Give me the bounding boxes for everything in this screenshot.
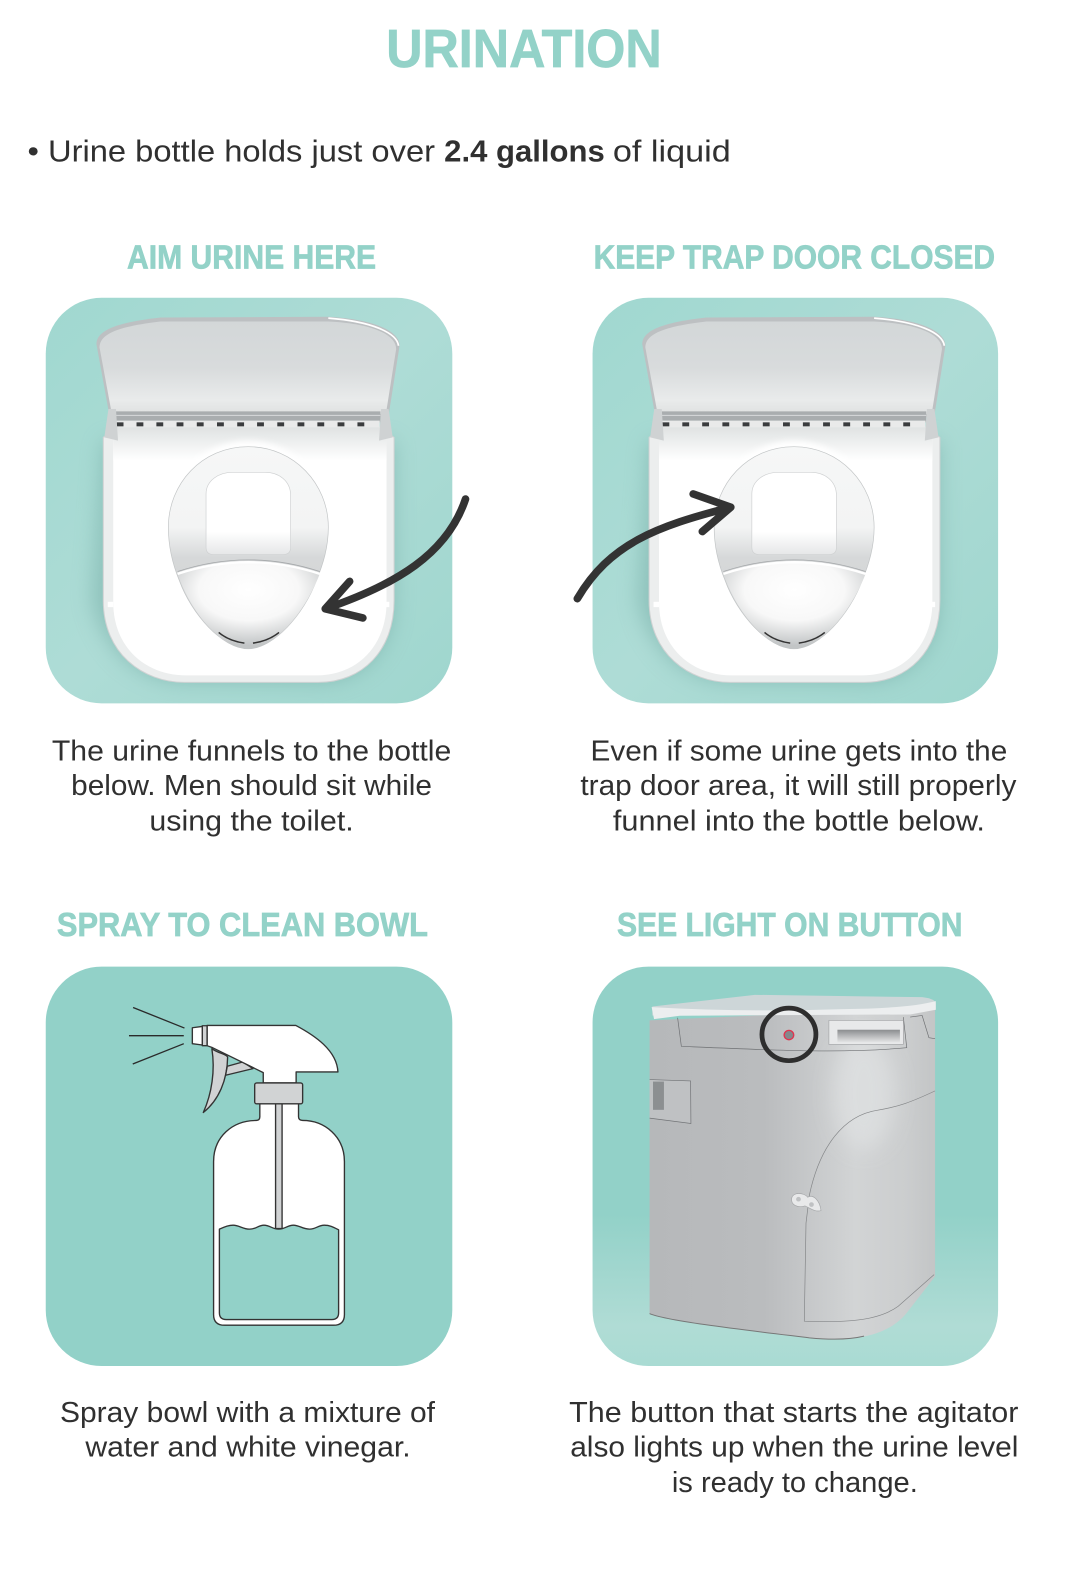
panel: aim urine here — [46, 239, 466, 837]
description: Even if some urine gets into the — [591, 735, 1007, 767]
description: Spray bowl with a mixture of — [60, 1397, 436, 1429]
description: using the toilet. — [149, 805, 354, 837]
heading: KEEP TRAP DOOR CLOSED — [594, 239, 995, 276]
side hatch — [650, 1080, 691, 1123]
description: The button that starts the agitator — [569, 1397, 1019, 1429]
tile background — [46, 967, 452, 1366]
description — [60, 1397, 436, 1463]
arrow to bowl — [325, 499, 466, 618]
tile background — [593, 967, 998, 1366]
heading: SPRAY TO CLEAN BOWL — [57, 907, 428, 944]
panel: spray to clean bowl — [46, 907, 452, 1463]
bullet: urine bottle capacity: of liquid — [613, 135, 731, 169]
description: also lights up when the urine level — [570, 1431, 1018, 1463]
panel: see light on button — [569, 907, 1019, 1499]
unit body — [650, 1007, 935, 1339]
callout ring — [762, 1008, 816, 1061]
arrow to trap door — [577, 494, 731, 599]
handle slot — [829, 1020, 903, 1044]
description — [569, 1397, 1019, 1499]
lid — [652, 995, 936, 1015]
toilet top view — [638, 317, 945, 682]
bullet: urine bottle capacity: 2.4 gallons — [444, 135, 605, 169]
description: funnel into the bottle below. — [613, 805, 985, 837]
toilet top view — [92, 317, 400, 682]
description: The urine funnels to the bottle — [52, 735, 451, 767]
description: trap door area, it will still properly — [580, 770, 1017, 802]
heading: SEE LIGHT ON BUTTON — [617, 907, 963, 944]
tile background — [593, 298, 998, 703]
indicator light — [784, 1030, 794, 1040]
control strip outline — [678, 1015, 935, 1051]
bullet: urine bottle capacity — [27, 135, 731, 169]
title: URINATION — [386, 19, 662, 79]
description: water and white vinegar. — [84, 1431, 411, 1463]
tile background — [46, 298, 452, 703]
description: below. Men should sit while — [71, 770, 432, 802]
bullet: urine bottle capacity: • Urine bottle holds just over — [27, 135, 435, 169]
description — [52, 735, 451, 837]
panel: keep trap door closed — [577, 239, 1017, 837]
description — [580, 735, 1017, 837]
description: is ready to change. — [672, 1467, 918, 1499]
door seam — [804, 1091, 935, 1322]
icon: spray bottle — [129, 1007, 344, 1325]
toilet unit side view — [650, 995, 936, 1339]
door latch — [792, 1194, 821, 1211]
heading: AIM URINE HERE — [127, 239, 376, 276]
